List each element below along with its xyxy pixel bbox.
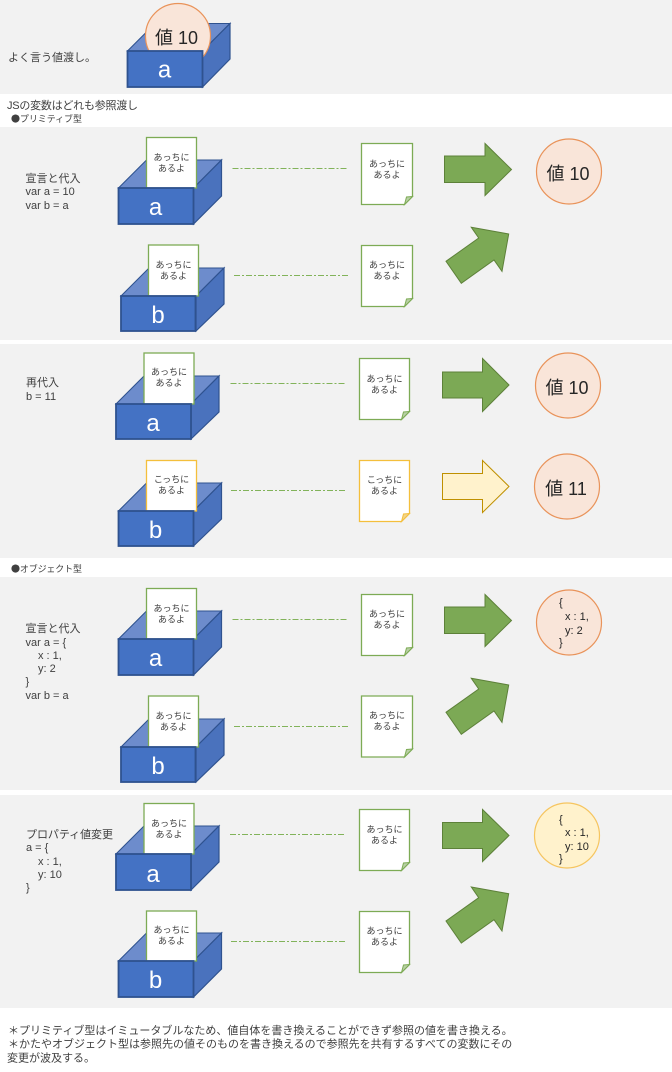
heading: primitive type: ●プリミティブ型 xyxy=(11,112,82,125)
box a with note: a xyxy=(149,645,163,672)
changed object circle: y: 10 xyxy=(565,841,589,853)
footnote xyxy=(7,1023,513,1064)
document b: あるよ xyxy=(371,486,398,496)
code text: x : 1, xyxy=(38,650,62,662)
document a: あっちに xyxy=(366,374,403,384)
document a: あるよ xyxy=(371,836,398,846)
intro text: よく言う値渡し。 xyxy=(8,51,96,64)
changed object circle xyxy=(534,803,600,868)
box b with note: あるよ xyxy=(160,722,187,732)
box b with changed note xyxy=(118,460,222,546)
document b: あっちに xyxy=(366,926,403,936)
box b with changed note: こっちに xyxy=(154,474,189,484)
document a: あっちに xyxy=(366,824,403,834)
box b with note xyxy=(118,911,222,997)
document b: あるよ xyxy=(373,271,401,281)
box b with note: b xyxy=(151,753,165,780)
intro box a with value 10 xyxy=(128,4,230,87)
object circle: x : 1, xyxy=(565,611,589,623)
heading: object type: ●オブジェクト型 xyxy=(11,562,82,575)
value circle 11 xyxy=(534,454,600,519)
document a xyxy=(362,144,412,204)
document b: あるよ xyxy=(373,722,401,732)
code text: 宣言と代入 xyxy=(26,623,80,635)
box a with note: a xyxy=(146,410,160,437)
value circle 10 xyxy=(536,139,602,204)
code text: 宣言と代入 xyxy=(26,173,80,185)
document b xyxy=(360,912,410,972)
code text: } xyxy=(26,676,30,688)
document a: あっちに xyxy=(369,159,405,169)
box a with note xyxy=(118,588,222,675)
box a with note: あっちに xyxy=(151,818,187,828)
box a with note: あっちに xyxy=(153,604,190,614)
connector a xyxy=(230,382,345,384)
code text: プロパティ値変更 xyxy=(26,828,113,841)
footnote line 1: ＊プリミティブ型はイミュータブルなため、値自体を書き換えることができず参照の値を書き換える。 xyxy=(8,1023,513,1037)
box a with note: a xyxy=(149,194,163,221)
value circle 10: 値 10 xyxy=(545,378,589,398)
changed object circle: } xyxy=(559,853,563,865)
value circle 10 xyxy=(536,353,600,418)
connector b xyxy=(231,490,346,492)
object circle xyxy=(536,590,602,655)
panel: object property change xyxy=(0,795,672,1008)
connector a xyxy=(230,834,345,836)
arrow a to value xyxy=(444,144,512,196)
document b: あっちに xyxy=(369,260,405,270)
box b with changed note: あるよ xyxy=(158,486,185,496)
changed object circle: { xyxy=(559,814,563,826)
code text: 再代入 xyxy=(26,377,59,389)
document b: あっちに xyxy=(369,710,405,720)
connector a xyxy=(232,168,347,170)
box a with note: あっちに xyxy=(153,152,190,162)
box b with note: あっちに xyxy=(153,925,190,935)
changed object circle: x : 1, xyxy=(565,827,589,839)
connector b xyxy=(234,726,348,728)
box b with note: あっちに xyxy=(155,711,192,721)
box a with note xyxy=(116,353,219,439)
arrow b to value 11 xyxy=(442,460,509,512)
arrow b to value xyxy=(446,227,509,283)
code text: var a = { xyxy=(26,637,66,649)
panel: primitive declaration xyxy=(0,127,672,340)
code lines: x : 1, xyxy=(38,856,62,868)
box a with note: あるよ xyxy=(155,830,183,840)
code lines: y: 10 xyxy=(38,869,62,881)
value circle 11: 値 11 xyxy=(545,479,587,499)
footnote line 3: 変更が波及する。 xyxy=(7,1050,95,1064)
document b xyxy=(362,696,412,757)
intro box a with value 10: 値 10 xyxy=(155,28,198,48)
arrow b to object xyxy=(446,887,509,943)
box b with changed note: b xyxy=(149,517,162,544)
box a with note xyxy=(118,138,222,224)
box a with note: あっちに xyxy=(151,367,187,377)
footnote line 2: ＊かたやオブジェクト型は参照先の値そのものを書き換えるので参照先を共有するすべての変数にその xyxy=(8,1036,512,1050)
document a: あるよ xyxy=(373,620,401,630)
heading: all variables are pass by reference: JSの変数はどれも参照渡し xyxy=(7,99,138,112)
document a xyxy=(360,358,410,420)
document a: あるよ xyxy=(373,170,401,180)
object circle: } xyxy=(559,637,563,649)
panel: object declaration xyxy=(0,577,672,790)
code text: var b = a xyxy=(26,690,69,702)
box b with note: あるよ xyxy=(158,936,185,946)
object circle: { xyxy=(559,597,563,609)
value circle 10: 値 10 xyxy=(546,164,590,184)
document b: こっちに xyxy=(367,475,402,485)
intro box a with value 10: a xyxy=(158,56,172,84)
document a xyxy=(360,810,410,870)
box b with note xyxy=(121,696,224,782)
code text: var b = a xyxy=(26,200,69,212)
arrow a to object xyxy=(442,810,509,862)
panel: intro pass by value xyxy=(0,0,672,94)
box b with note: b xyxy=(149,967,162,994)
arrow a to value 10 xyxy=(442,358,509,412)
document b xyxy=(360,460,410,522)
connector a xyxy=(232,618,347,620)
document a xyxy=(362,594,412,656)
box a with note: a xyxy=(146,861,160,888)
connector b xyxy=(234,274,348,276)
box b with note: あるよ xyxy=(160,271,187,281)
code text: var a = 10 xyxy=(26,186,75,198)
box a with note: あるよ xyxy=(158,614,185,624)
code lines: } xyxy=(26,882,30,894)
document a: あっちに xyxy=(369,609,405,619)
box b with note xyxy=(121,245,224,331)
code text: b = 11 xyxy=(26,391,56,403)
box b with note: b xyxy=(151,302,165,329)
box b with note: あっちに xyxy=(155,260,192,270)
document b: あるよ xyxy=(371,937,398,947)
document b xyxy=(362,246,412,306)
document a: あるよ xyxy=(371,385,398,395)
box a with note: あるよ xyxy=(158,164,185,174)
box a with note xyxy=(116,804,219,890)
arrow b to object xyxy=(446,678,509,734)
connector b xyxy=(231,940,346,942)
object circle: y: 2 xyxy=(565,625,583,637)
code text: y: 2 xyxy=(38,663,56,675)
arrow a to object xyxy=(444,594,512,646)
box a with note: あるよ xyxy=(155,378,183,388)
panel: primitive reassign xyxy=(0,344,672,558)
code lines: a = { xyxy=(26,842,48,854)
